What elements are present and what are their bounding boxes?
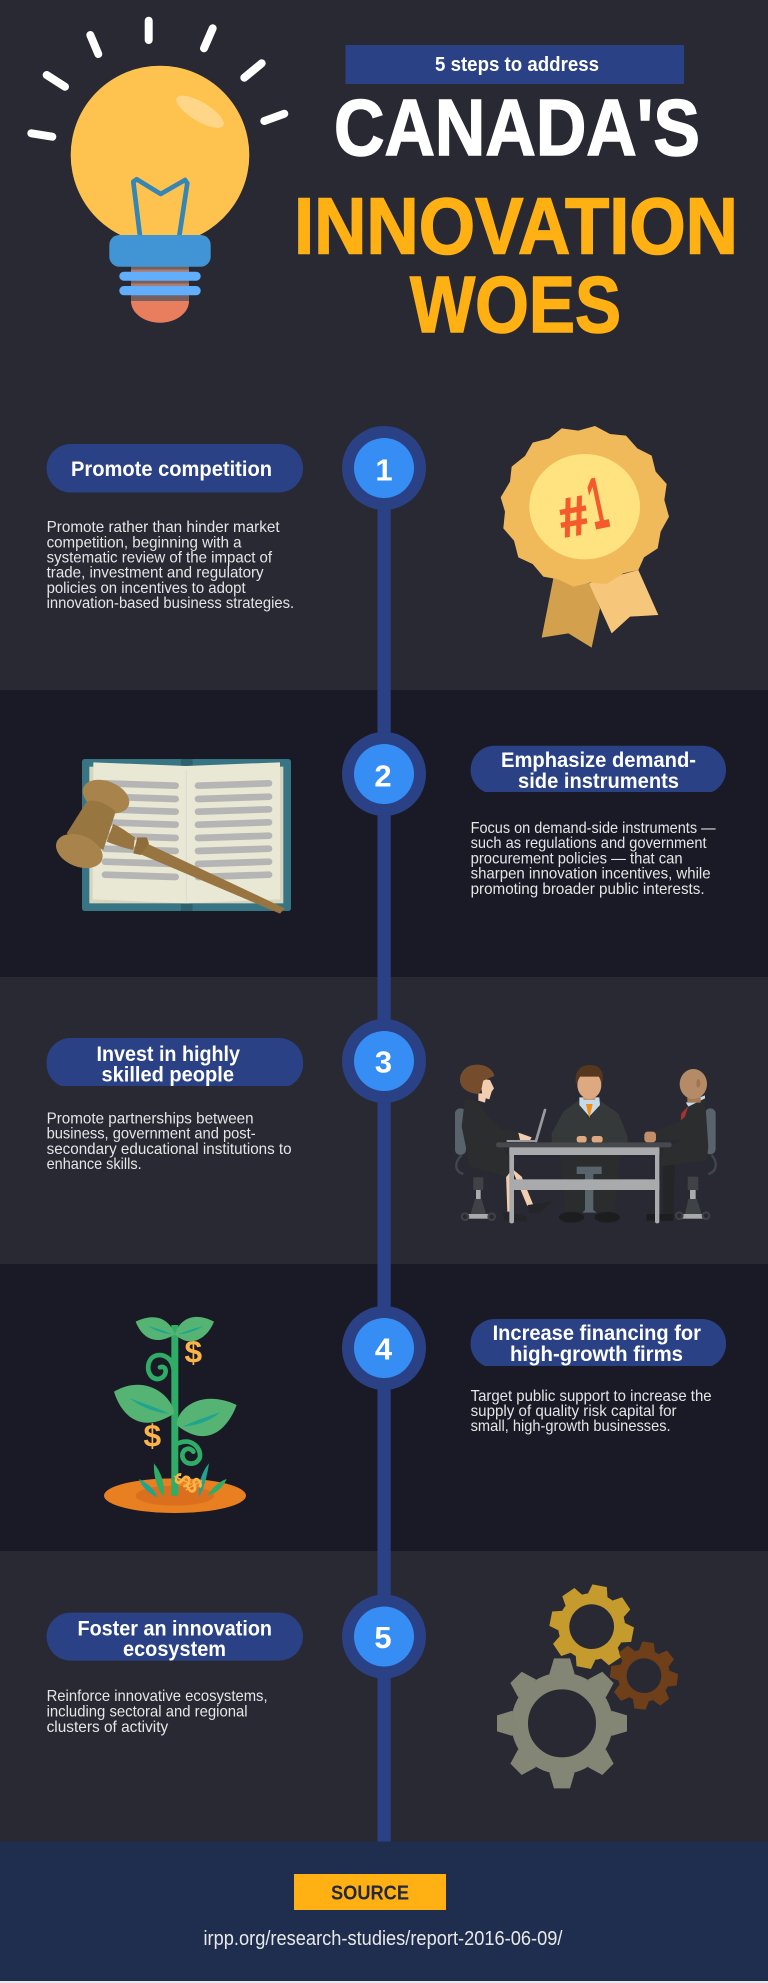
- badge 2: 2: [374, 758, 392, 794]
- step 4 body text: supply of quality risk capital for: [471, 1403, 677, 1420]
- step 3 heading pill: Invest in highly: [96, 1043, 240, 1066]
- step 3 body text: [47, 1110, 292, 1173]
- badge 2: [342, 732, 426, 816]
- icon: money plant: $: [144, 1417, 162, 1453]
- step 1 body text: trade, investment and regulatory: [47, 565, 264, 582]
- step 2 heading pill: side instruments: [518, 770, 679, 793]
- badge 1: 1: [375, 452, 393, 488]
- step 5 heading pill: [47, 1613, 303, 1661]
- step 1 body text: innovation-based business strategies.: [47, 595, 294, 612]
- badge 5: 5: [374, 1620, 392, 1655]
- badge 5: [342, 1594, 426, 1678]
- step 1 body text: [47, 519, 294, 612]
- step 4 heading pill: high-growth firms: [510, 1343, 683, 1366]
- step 5 body text: Reinforce innovative ecosystems,: [47, 1688, 268, 1705]
- icon: number one rosette: #: [554, 483, 593, 549]
- step 3 heading pill: [47, 1038, 303, 1086]
- step 4 heading pill: Increase financing for: [493, 1322, 701, 1345]
- step 5 heading pill: Foster an innovation: [78, 1618, 272, 1640]
- step 2 body text: such as regulations and government: [471, 835, 707, 852]
- source label: [294, 1874, 446, 1910]
- title: Innovation Woes: [294, 182, 738, 349]
- gavel: [51, 773, 285, 914]
- step 2 body text: procurement policies — that can: [471, 850, 683, 868]
- step 3 body text: Promote partnerships between: [47, 1110, 254, 1128]
- step 2 body text: Focus on demand-side instruments —: [471, 820, 716, 837]
- step 1 body text: systematic review of the impact of: [47, 550, 273, 566]
- panel: step 4 financing for high-growth firms: [0, 1264, 768, 1551]
- footer: source: [0, 1842, 768, 1983]
- icon: number one rosette: 1: [580, 461, 615, 546]
- title: Innovation Woes: WOES: [410, 260, 621, 349]
- badge 4: [342, 1306, 426, 1390]
- title: Canada's: CANADA'S: [334, 83, 700, 172]
- step 3 heading pill: skilled people: [102, 1064, 234, 1086]
- right chair: [676, 1108, 716, 1219]
- step 1 body text: policies on incentives to adopt: [47, 580, 246, 597]
- step 1 body text: Promote rather than hinder market: [47, 519, 280, 536]
- step 5 body text: including sectoral and regional: [47, 1704, 248, 1720]
- banner: 5 steps to address: [346, 45, 684, 84]
- source label: SOURCE: [331, 1882, 409, 1904]
- yellow gear: [543, 1578, 641, 1676]
- step 4 body text: small, high-growth businesses.: [471, 1418, 671, 1435]
- banner: 5 steps to address: 5 steps to address: [435, 54, 599, 76]
- step 3 body text: enhance skills.: [47, 1156, 142, 1173]
- header panel: [0, 0, 768, 420]
- icon: money plant: [104, 1317, 246, 1513]
- brown gear: [606, 1638, 682, 1713]
- step 5 heading pill: ecosystem: [123, 1638, 226, 1661]
- icon: money plant: $: [185, 1333, 203, 1369]
- step 1 body text: competition, beginning with a: [47, 534, 242, 551]
- left chair: [455, 1108, 495, 1220]
- step 4 body text: Target public support to increase the: [471, 1388, 712, 1405]
- panel: step 2 demand-side instruments: [0, 690, 768, 977]
- vertical timeline with numbered badges: [342, 426, 426, 1842]
- badge 1: [342, 426, 426, 510]
- step 3 body text: secondary educational institutions to: [47, 1141, 292, 1158]
- icon: three gears: [497, 1578, 682, 1788]
- large grey gear: [497, 1658, 627, 1788]
- source url: irpp.org/research-studies/report-2016-06-09/: [204, 1928, 563, 1950]
- icon: money plant: $: [180, 1473, 209, 1497]
- step 1 heading pill: [47, 444, 303, 492]
- icon: light bulb: [31, 21, 284, 323]
- man in the centre: [552, 1065, 628, 1223]
- icon: open book with gavel: [51, 759, 291, 914]
- step 2 heading pill: Emphasize demand-: [501, 749, 696, 772]
- step 1 heading pill: Promote competition: [71, 458, 272, 481]
- icon: number one rosette: [501, 426, 669, 648]
- panel: step 5 innovation ecosystem: [0, 1551, 768, 1842]
- step 2 heading pill: [471, 746, 726, 793]
- step 4 body text: [471, 1388, 712, 1435]
- badge 4: 4: [375, 1332, 393, 1367]
- badge 3: [342, 1019, 426, 1103]
- man on the right: [644, 1069, 708, 1221]
- step 3 body text: business, government and post-: [47, 1126, 256, 1143]
- badge 3: 3: [375, 1045, 392, 1080]
- icon: three business people at table: [455, 1065, 716, 1223]
- panel: step 1 promote competition: [0, 420, 768, 690]
- step 2 body text: promoting broader public interests.: [471, 881, 705, 898]
- meeting table: [496, 1142, 672, 1223]
- step 5 body text: clusters of activity: [47, 1719, 168, 1736]
- step 5 body text: [47, 1688, 268, 1736]
- panel: step 3 highly skilled people: [0, 977, 768, 1264]
- icon: money plant: $: [168, 1469, 197, 1492]
- woman with laptop: [460, 1065, 552, 1221]
- step 2 body text: [471, 820, 716, 898]
- step 4 heading pill: [471, 1319, 726, 1366]
- step 2 body text: sharpen innovation incentives, while: [471, 866, 711, 883]
